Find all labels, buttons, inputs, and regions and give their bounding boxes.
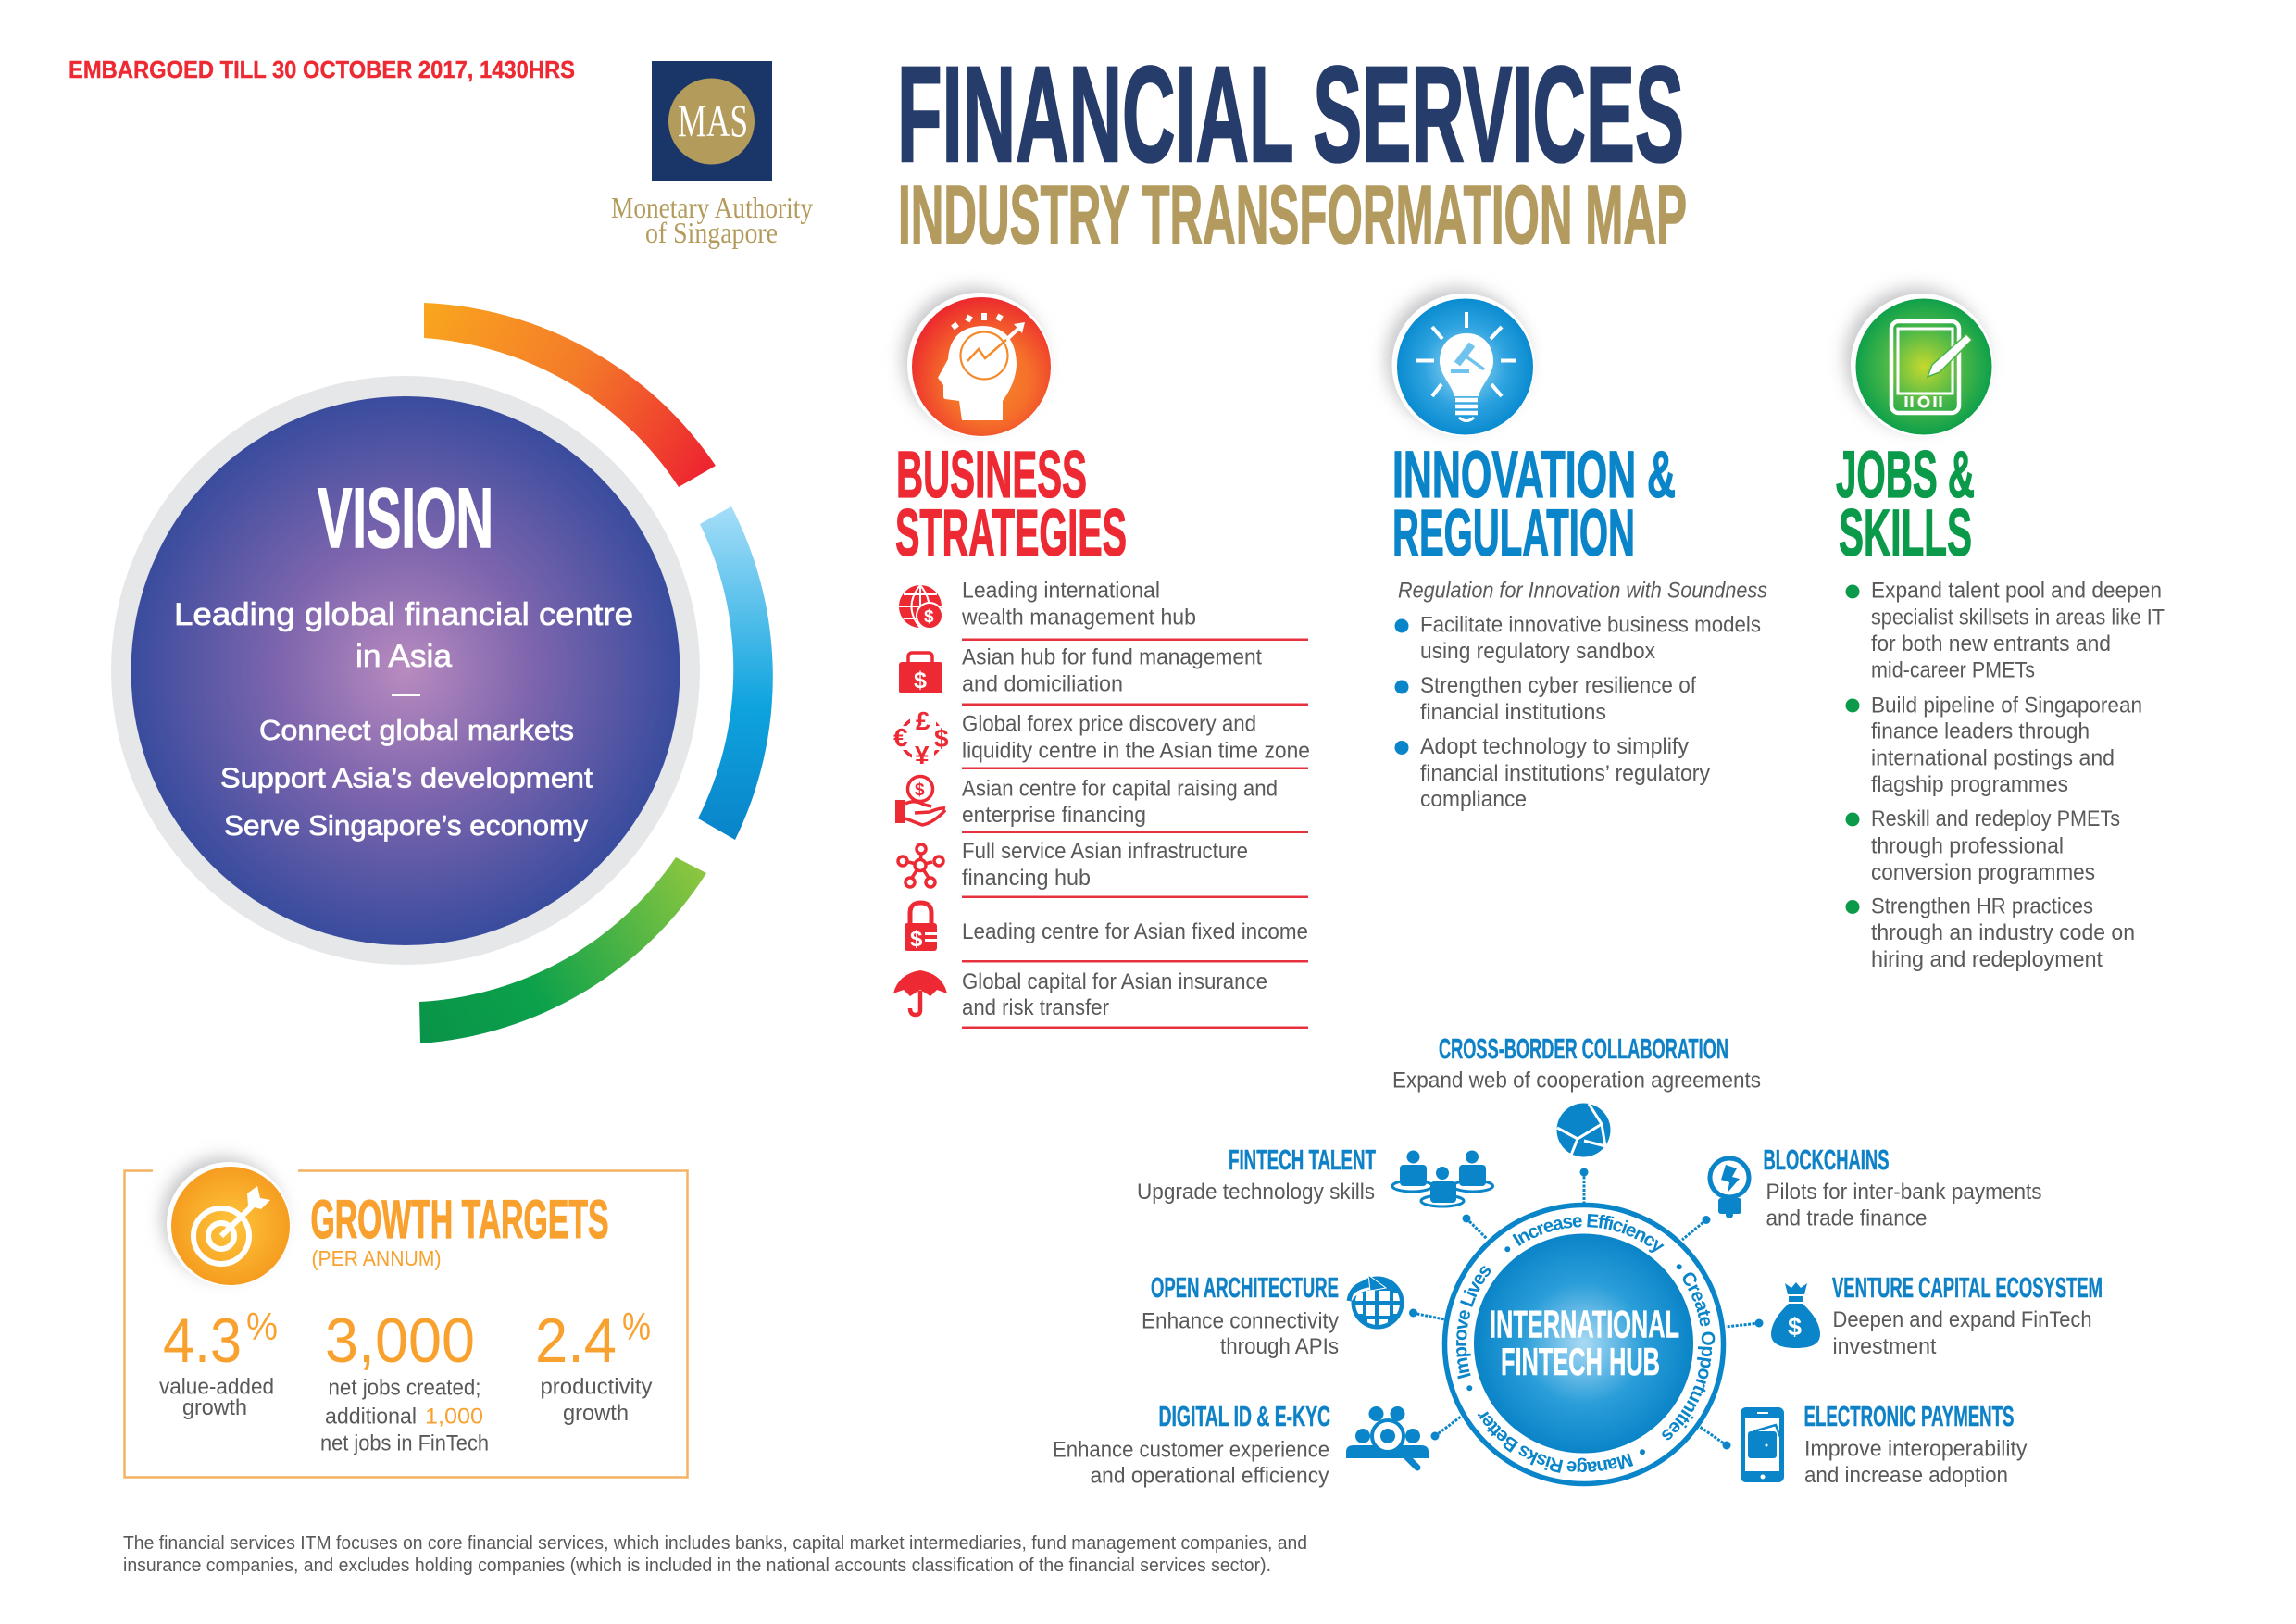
list item: capital raising: enterprise financing [962, 803, 1146, 828]
box frame [124, 1170, 687, 1478]
arc: blue [698, 506, 773, 840]
bullet: cyber resilience: financial institutions [1420, 700, 1606, 725]
icon: target and arrow [162, 1157, 291, 1286]
hub spokes [1409, 1168, 1763, 1450]
heading: jobs and skills: SKILLS [1839, 497, 1972, 570]
bullet: reskill: through professional [1871, 833, 2064, 859]
icon: bulb with lightning bolt [1710, 1158, 1749, 1218]
stat: net jobs: 3,000 [325, 1305, 475, 1376]
bullet: pipeline of leaders [1846, 693, 2142, 797]
hub title: FINTECH HUB [1501, 1340, 1660, 1383]
item: blockchains: and trade finance [1766, 1206, 1928, 1231]
vision heading: VISION [318, 471, 493, 566]
icon: phone with wallet [1741, 1407, 1784, 1482]
logo: Monetary Authority of Singapore: Monetary Authority [611, 191, 813, 224]
list item: insurance: and risk transfer [962, 995, 1109, 1020]
list item: fixed income: Leading centre for Asian fixed income [962, 919, 1308, 944]
heading: business strategies: BUSINESS [896, 439, 1087, 512]
stat: net jobs: additional [325, 1404, 417, 1430]
bullet: talent pool: specialist skillsets in areas like IT [1871, 606, 2165, 630]
bullet: talent pool: for both new entrants and [1871, 631, 2111, 656]
item: fintech talent: Upgrade technology skills [1137, 1180, 1375, 1205]
stat: value-added growth: growth [182, 1395, 247, 1420]
heading: jobs and skills: JOBS & [1836, 439, 1975, 512]
panel: jobs and skills [1836, 288, 2165, 972]
stat: productivity growth: productivity [541, 1374, 652, 1400]
stat: net jobs: 1,000 [425, 1404, 483, 1430]
heading: innovation and regulation: INNOVATION & [1392, 439, 1676, 512]
item: electronic payments: ELECTRONIC PAYMENTS [1803, 1400, 2015, 1432]
item: electronic payments: Improve interoperability [1804, 1437, 2028, 1461]
bullet: sandbox [1394, 613, 1761, 664]
bullet: adopt technology [1394, 734, 1710, 812]
bullet: talent pool [1846, 578, 2165, 683]
item: open architecture: OPEN ARCHITECTURE [1151, 1271, 1339, 1304]
icon: money bag: $ [1788, 1313, 1802, 1341]
stat: net jobs: net jobs in FinTech [320, 1431, 489, 1455]
heading: business strategies: STRATEGIES [895, 497, 1127, 570]
icon: network nodes [898, 844, 943, 887]
heading: jobs and skills [1836, 439, 1975, 570]
arc: orange to red [424, 303, 716, 487]
bullet: reskill: Reskill and redeploy PMETs [1871, 806, 2120, 831]
bullet: talent pool: Expand talent pool and deepen [1871, 578, 2162, 604]
icon: hand with coin: $ [915, 781, 925, 800]
curved ring text: Improve Lives [1455, 1266, 1491, 1380]
stat: value-added growth: 4.3 [163, 1305, 242, 1376]
stat: value-added growth [159, 1305, 278, 1420]
bullet: reskill [1846, 806, 2120, 885]
icon: people at tables [1392, 1150, 1492, 1206]
item: fintech talent [1137, 1143, 1492, 1206]
bullet: reskill: conversion programmes [1871, 860, 2095, 885]
heading: growth targets [311, 1190, 609, 1270]
bullet: talent pool: mid-career PMETs [1871, 657, 2035, 683]
panel: international fintech hub [1053, 1032, 2103, 1489]
bullet: pipeline of leaders: finance leaders through [1871, 718, 2090, 744]
item: fintech talent: FINTECH TALENT [1229, 1143, 1376, 1176]
list item: insurance [893, 969, 1308, 1029]
bullet: cyber resilience: Strengthen cyber resilience of [1420, 673, 1696, 698]
item: electronic payments [1741, 1400, 2028, 1488]
hub disc [1474, 1233, 1693, 1454]
footnote: The financial services ITM focuses on core financial services, which includes banks, capital market intermediaries, fund management companies, and [123, 1533, 1307, 1554]
list item: infrastructure [898, 839, 1308, 898]
item: digital id and e-kyc: and operational efficiency [1091, 1463, 1329, 1489]
item: cross-border collaboration [1392, 1032, 1761, 1157]
icon: briefcase: $ [914, 668, 927, 693]
list item: forex: Global forex price discovery and [962, 711, 1256, 737]
bullet: adopt technology: Adopt technology to simplify [1420, 734, 1689, 759]
vision statement: Leading global financial centre [174, 597, 633, 632]
icon: currency circle [893, 706, 951, 769]
list item: wealth management [899, 578, 1308, 641]
icon: umbrella [893, 970, 947, 1015]
panel: growth targets [124, 1157, 687, 1478]
item: venture capital ecosystem: investment [1833, 1334, 1937, 1359]
bullet: pipeline of leaders: Build pipeline of Singaporean [1871, 693, 2142, 718]
list item: insurance: Global capital for Asian insurance [962, 969, 1267, 994]
item: blockchains: Pilots for inter-bank payments [1766, 1180, 2042, 1205]
bullet: HR practices [1846, 894, 2135, 972]
title: INDUSTRY TRANSFORMATION MAP [898, 169, 1687, 262]
panel: innovation and regulation [1387, 288, 1767, 812]
icon: connected globe [1557, 1104, 1611, 1157]
icon: tablet and pen [1845, 288, 1993, 436]
icon: padlock [905, 903, 937, 952]
list item: infrastructure: Full service Asian infrastructure [962, 839, 1248, 864]
stat: productivity growth: growth [563, 1401, 629, 1426]
heading: growth targets: (PER ANNUM) [311, 1246, 441, 1270]
icon: currency circle: £ [916, 706, 930, 735]
icon: hand with coin [895, 776, 945, 825]
icon: money bag [1771, 1282, 1820, 1348]
icon: currency circle: $ [934, 724, 949, 753]
arc: green [419, 857, 706, 1043]
curved ring text [1455, 1214, 1715, 1473]
vision statement: Connect global markets [259, 714, 574, 746]
icon: globe with dollar [899, 585, 942, 629]
icon: globe with dollar: $ [924, 607, 934, 627]
bullet: HR practices: hiring and redeployment [1871, 947, 2103, 972]
vision statement: Serve Singapore’s economy [224, 809, 589, 842]
item: cross-border collaboration: CROSS-BORDER COLLABORATION [1439, 1032, 1728, 1065]
curved ring text: Increase Efficiency [1513, 1214, 1665, 1253]
footnote: insurance companies, and excludes holding companies (which is included in the national accounts classification of the financial services sector). [123, 1555, 1271, 1576]
list item: capital raising [895, 776, 1308, 833]
list item: capital raising: Asian centre for capital raising and [962, 776, 1278, 802]
bullet: pipeline of leaders: international postings and [1871, 746, 2115, 770]
bullet: pipeline of leaders: flagship programmes [1871, 772, 2068, 797]
icon: globe with arrow [1349, 1275, 1404, 1330]
bullet: cyber resilience [1394, 673, 1696, 725]
bullet: adopt technology: financial institutions’ regulatory [1420, 761, 1710, 786]
item: cross-border collaboration: Expand web of cooperation agreements [1392, 1068, 1761, 1093]
hub title: INTERNATIONAL [1490, 1302, 1679, 1346]
bullet: adopt technology: compliance [1420, 787, 1527, 812]
stat: net jobs: net jobs created; [328, 1376, 481, 1400]
item: open architecture: through APIs [1220, 1334, 1339, 1359]
heading: innovation and regulation: REGULATION [1392, 497, 1635, 570]
list item: wealth management: wealth management hub [961, 606, 1196, 630]
title [897, 39, 1687, 262]
item: venture capital ecosystem [1771, 1271, 2103, 1359]
list item: fixed income [905, 903, 1308, 963]
item: open architecture [1142, 1271, 1404, 1359]
list item: forex: liquidity centre in the Asian time zone [962, 739, 1310, 763]
icon: currency circle: ¥ [915, 741, 930, 769]
vision disc [131, 396, 680, 945]
item: blockchains: BLOCKCHAINS [1763, 1143, 1889, 1176]
stat: productivity growth: % [622, 1305, 651, 1348]
vision statement [174, 597, 633, 842]
stat: productivity growth [535, 1305, 652, 1426]
footnote [123, 1533, 1307, 1576]
logo: Monetary Authority of Singapore [611, 61, 813, 249]
list item: forex [893, 706, 1310, 769]
item: open architecture: Enhance connectivity [1142, 1309, 1339, 1333]
stat: net jobs [320, 1305, 489, 1455]
icon: briefcase [899, 653, 942, 693]
icon: people under magnifier [1346, 1406, 1429, 1468]
curved ring text: Create Opportunities [1662, 1272, 1715, 1441]
logo: Monetary Authority of Singapore: of Singapore [645, 216, 778, 249]
stat: value-added growth: value-added [159, 1374, 274, 1400]
list item: fund management [899, 644, 1308, 706]
embargo notice: EMBARGOED TILL 30 OCTOBER 2017, 1430HRS [69, 56, 575, 83]
vision statement: Support Asia’s development [220, 761, 593, 794]
item: blockchains [1710, 1143, 2042, 1231]
item: venture capital ecosystem: Deepen and expand FinTech [1833, 1307, 2092, 1332]
bullet: HR practices: Strengthen HR practices [1871, 894, 2093, 918]
icon: light bulb with gavel [1387, 288, 1535, 436]
hub ring [1444, 1206, 1724, 1483]
tagline: Regulation for Innovation with Soundness [1398, 578, 1767, 604]
item: digital id and e-kyc: Enhance customer experience [1053, 1437, 1329, 1463]
vision outer ring [111, 376, 700, 965]
list item: infrastructure: financing hub [962, 866, 1091, 891]
heading: growth targets: GROWTH TARGETS [311, 1190, 609, 1250]
bullet: HR practices: through an industry code on [1871, 920, 2135, 945]
icon: head with rising chart [903, 288, 1052, 437]
stat: productivity growth: 2.4 [535, 1305, 617, 1376]
list item: fund management: and domiciliation [962, 672, 1123, 696]
bullet: sandbox: Facilitate innovative business models [1420, 613, 1761, 637]
heading: innovation and regulation [1392, 439, 1676, 570]
bullet: sandbox: using regulatory sandbox [1420, 639, 1655, 664]
list item: wealth management: Leading international [962, 578, 1160, 604]
icon: padlock: $ [910, 927, 923, 952]
item: electronic payments: and increase adoption [1804, 1463, 2008, 1488]
panel: business strategies [893, 288, 1310, 1029]
list item: fund management: Asian hub for fund management [962, 644, 1262, 670]
curved ring text: Manage Risks Better [1478, 1411, 1633, 1473]
item: digital id and e-kyc: DIGITAL ID & E-KYC [1159, 1400, 1330, 1432]
logo: Monetary Authority of Singapore: MAS [678, 94, 748, 146]
icon: currency circle: € [893, 723, 908, 752]
stat: value-added growth: % [246, 1305, 278, 1348]
heading: business strategies [895, 439, 1127, 570]
item: digital id and e-kyc [1053, 1400, 1429, 1489]
hub title [1490, 1302, 1679, 1383]
panel: vision [111, 303, 773, 1043]
item: venture capital ecosystem: VENTURE CAPITAL ECOSYSTEM [1832, 1271, 2103, 1304]
vision statement: in Asia [356, 639, 452, 674]
